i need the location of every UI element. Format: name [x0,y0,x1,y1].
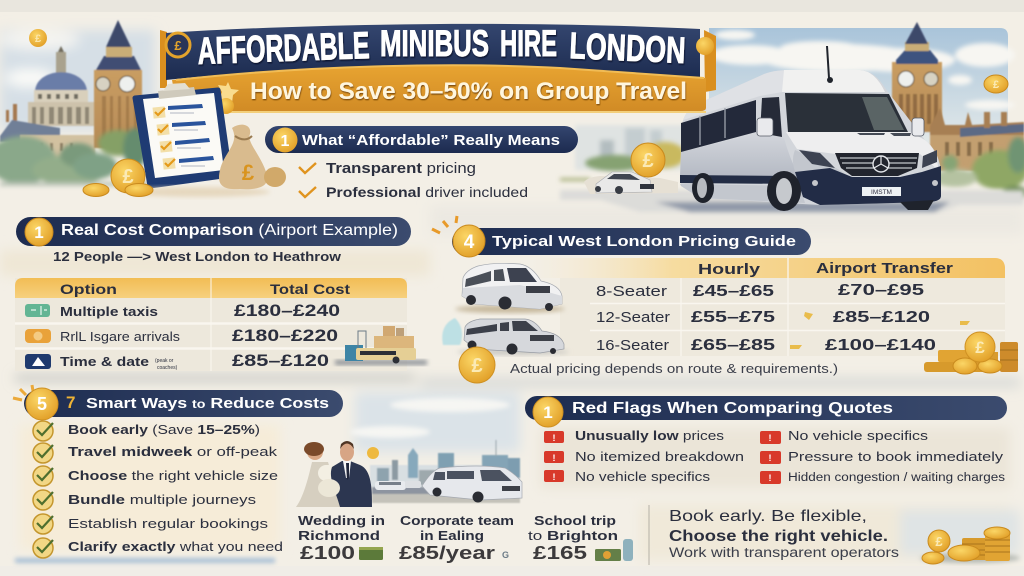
trees [0,128,150,186]
minibus van illustration [680,46,941,211]
advice line one: Book early. Be flexible, [669,508,867,525]
pricing table: Hourly [698,261,761,278]
side windows [681,100,756,152]
orange ribbon [172,65,706,113]
side stripe [680,175,800,184]
plant accent [442,318,462,345]
silver front corner [793,150,852,178]
city skyline [370,440,520,503]
tip: bundle journeys [33,490,257,510]
row: 16-seater: 16-Seater [596,338,669,354]
tip: clarify needs [33,538,283,558]
distant cars [375,481,421,490]
card: wedding: £100 [300,543,355,563]
bumper [795,166,941,205]
gold coin stack: £ [975,338,985,357]
gothic building [930,108,1024,171]
tip: regular bookings [33,514,269,534]
tip: book early: Book early (Save 15–25% ) [68,422,260,437]
row: 16-seater: £65–£85 [691,337,776,354]
roof [682,70,790,125]
grille [835,153,919,176]
banner burst [218,82,239,103]
coin mid [631,143,665,177]
heading pill [452,228,811,255]
row: multiple taxis: Multiple taxis [60,304,158,319]
Big Ben left [94,20,142,148]
sky and clouds [0,30,155,130]
tip: clarify needs: Clarify exactly what you need [68,539,283,554]
antenna [827,46,829,78]
tip: travel midweek: Travel midweek or off-peak [68,444,278,459]
pound coin [459,347,495,383]
right trees [933,137,1024,198]
row: 8-seater: £45–£65 [693,283,775,300]
number badge [533,397,563,427]
wheels [767,171,801,211]
row: time and date: coaches) [157,365,178,371]
hood [786,132,938,170]
Big Ben right [892,22,942,132]
row: rail and arrivals: RrlL Isgare arrivals [60,330,180,344]
heading text: Real Cost Comparison (Airport Example) [61,222,398,239]
row: 8-seater [596,282,925,300]
banner coin [696,37,714,55]
card: wedding: Richmond [298,528,380,543]
row: time and date: £85–£120 [232,352,329,370]
burst accent [432,216,457,233]
row: rail and arrivals [25,327,338,345]
coin top-left: £ [35,33,41,45]
row: 12-seater: £55–£75 [691,309,776,326]
row: 12-seater: 12-Seater [596,310,670,326]
heading pill [265,126,578,153]
flag: hidden charges: ! [768,473,772,483]
card: wedding: Wedding in [298,513,385,528]
item: professional driver: Professional driver included [326,184,528,200]
heading pill [24,390,343,417]
advice line three: Work with transparent operators [669,545,899,560]
white van: 8 seater [455,263,565,313]
number badge [25,218,53,246]
row: 16-seater [596,337,936,354]
flag: vehicle specifics right [760,428,929,444]
heading pill [525,396,1007,420]
closing advice [649,505,899,565]
section: pricing guide [432,216,1018,383]
gold flecks [790,312,970,349]
money bag and coins [83,125,286,197]
tip: travel midweek [33,443,278,463]
coin right [984,75,1008,93]
card: corporate [399,513,514,563]
number badge [453,225,485,257]
checklist [33,421,283,558]
flag: low prices: Unusually low prices [575,428,725,443]
white limousine van [422,466,522,502]
row: multiple taxis [25,302,340,320]
card: corporate: Corporate team [400,513,514,528]
pricing table [530,258,1005,356]
pricing note: Actual pricing depends on route & requirements.) [510,362,838,376]
row: 12-seater: £85–£120 [833,309,930,326]
tip: vehicle size [33,466,278,486]
row: 16-seater: £100–£140 [825,337,936,354]
cost table: Total Cost [270,281,350,297]
cost table [15,278,407,371]
side panel [680,133,800,178]
row: rail and arrivals: £180–£220 [232,327,338,345]
money bag and coins: £ [122,166,134,188]
section: red flags [525,396,1007,484]
gold frame [160,30,167,88]
section: real cost comparison [15,217,427,371]
row: 12-seater [596,309,930,326]
row: time and date: Time & date [60,354,149,369]
section: smart ways [13,385,343,558]
coin over city [367,447,379,459]
mirrors [757,118,773,136]
right scene: sky, landmarks and town [560,22,1024,212]
card: corporate: G [502,550,509,560]
title banner [160,23,716,114]
card: school trip: to Brighton [528,528,618,543]
pound coin: £ [471,355,483,377]
flag: vehicle specifics right: No vehicle specifics [788,428,929,443]
flag: itemized breakdown: No itemized breakdown [575,449,744,464]
heading text: What “Affordable” Really Means [302,132,560,149]
left scene: London skyline [0,20,155,186]
section: what affordable means [265,126,578,200]
tip: vehicle size: Choose the right vehicle size [68,468,278,483]
bride and groom [296,441,372,507]
number badge: 1 [543,403,553,422]
money bag and coins: £ [242,160,255,185]
coin mid: £ [642,150,654,172]
card: school trip: School trip [534,513,616,528]
minibus van illustration: IMSTM [871,189,892,196]
navy ribbon [166,24,700,80]
coin right: £ [993,79,999,91]
heading text: Smart Ways to Reduce Costs [86,395,329,412]
heading text: Typical West London Pricing Guide [492,233,796,250]
row: time and date [25,352,329,371]
advice line two: Choose the right vehicle. [669,528,888,545]
route line: 12 People —> West London to Heathrow [53,249,342,264]
road [560,190,1024,212]
silver van: 12 seater [457,319,569,355]
row: multiple taxis: £180–£240 [234,302,340,320]
card: school trip [528,513,633,563]
flag list [544,428,1005,484]
number badge: 4 [464,232,475,253]
card: corporate: £85/year [399,543,495,563]
flag: hidden charges: Hidden congestion / waiting charges [788,472,1005,484]
clipboard checklist illustration [135,83,230,186]
luggage and coach illustration [335,326,427,365]
row: 8-seater: £70–£95 [838,282,925,299]
example cards [298,513,633,563]
main title: MINIBUS [380,23,489,64]
hazy mid skyline [575,125,685,170]
number badge: 5 [37,394,47,414]
flag: itemized breakdown: ! [552,453,556,463]
scene: wedding couple and city [296,440,522,507]
sky [709,28,1008,150]
flag: itemized breakdown [544,449,744,464]
headlights [799,150,835,168]
number badge: 1 [34,223,44,242]
gold coins pile: £ [935,534,943,549]
small cars [584,172,678,194]
heading text: 7 [66,393,75,412]
coin top-left [29,29,47,47]
number badge [272,128,298,152]
row: time and date: (peak or [155,358,174,364]
gold coins pile [920,527,1020,564]
flag: vehicle specifics [544,469,711,484]
flag: pressure to book: ! [768,453,772,463]
flag: pressure to book: Pressure to book immediately [788,449,1004,464]
main title: HIRE [500,23,557,64]
gold coin stack [924,332,1018,374]
number badge: 1 [281,133,290,150]
tip: bundle journeys: Bundle multiple journeys [68,492,257,507]
title banner: £ [174,38,182,53]
heading pill [16,217,411,246]
windscreen [785,93,908,132]
St Paul's dome [0,46,95,159]
pricing table: Airport Transfer [816,261,953,277]
card: corporate: in Ealing [420,528,484,543]
flag: low prices: ! [552,433,556,443]
main title: AFFORDABLE [197,25,370,73]
subtitle: How to Save 30–50% on Group Travel [250,78,687,105]
number badge [26,388,58,420]
burst accent [13,385,33,400]
item: transparent pricing: Transparent pricing [326,161,476,177]
cost table: Option [60,281,117,297]
card: wedding [298,513,385,563]
tip: book early [33,421,260,441]
tip: regular bookings: Establish regular bookings [68,516,269,531]
flag: hidden charges [760,471,1005,484]
flag: vehicle specifics: ! [552,472,556,482]
flag: vehicle specifics: No vehicle specifics [575,469,711,484]
heading text: Red Flags When Comparing Quotes [572,400,893,417]
main title: LONDON [569,25,686,71]
flag: vehicle specifics right: ! [768,433,772,443]
card: school trip: £165 [533,543,587,563]
emblem [166,33,190,57]
main title [197,23,686,73]
row: 8-seater: 8-Seater [596,284,667,300]
